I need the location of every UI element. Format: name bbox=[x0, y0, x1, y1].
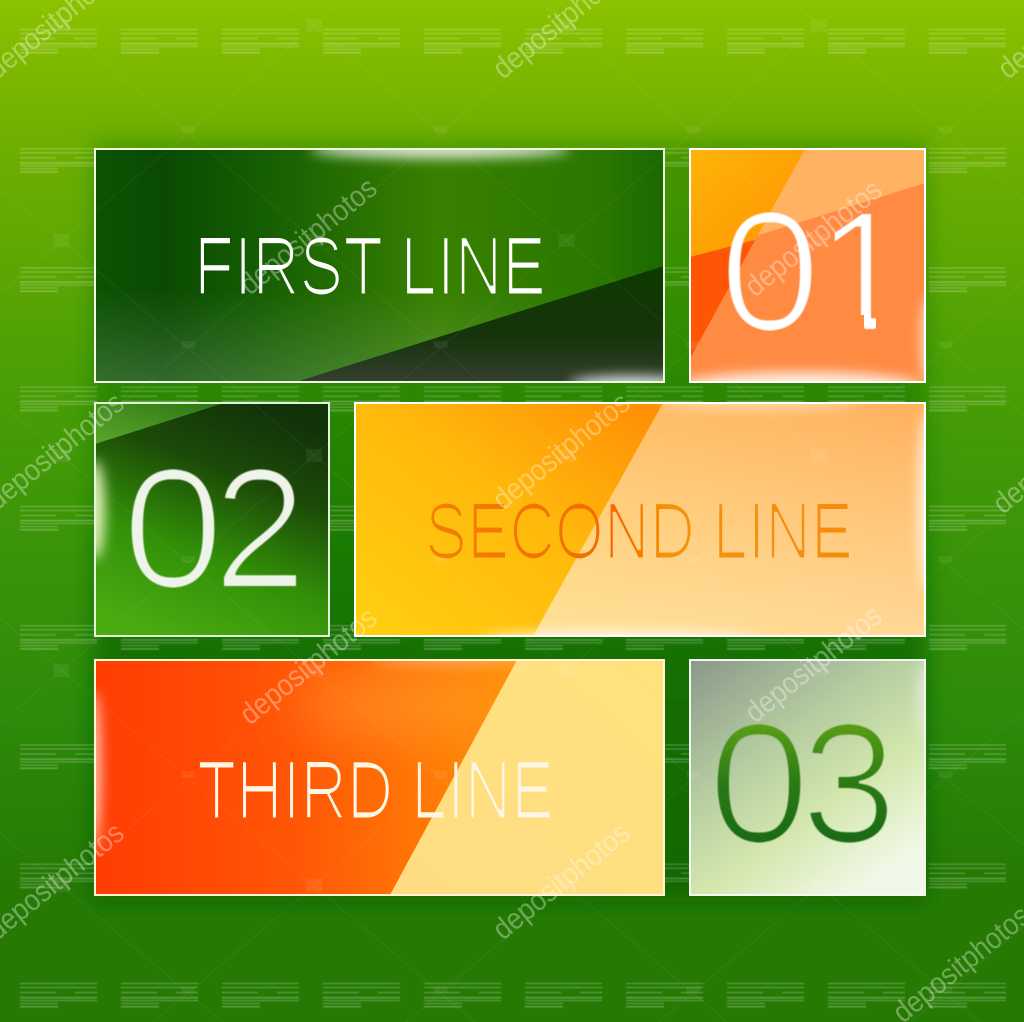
number: 01: 1 bbox=[816, 177, 910, 367]
depositphotos watermarks: depositphotos bbox=[234, 601, 383, 731]
dark shadow behind panels bbox=[92, 142, 928, 902]
number: 01 bbox=[728, 212, 876, 332]
depositphotos watermarks: depositphotos bbox=[487, 816, 636, 946]
light upper facet bbox=[758, 150, 924, 236]
panel border: number 02 bbox=[95, 403, 329, 636]
amber left facet bbox=[355, 403, 663, 636]
number: 01: 0 bbox=[719, 177, 821, 367]
panel border: number 01 bbox=[690, 149, 925, 382]
panel: first line bbox=[96, 150, 663, 381]
panel: third line bbox=[87, 655, 664, 895]
panel border: third line bbox=[95, 660, 664, 895]
panel: number 03 bbox=[690, 660, 938, 895]
pale right facet bbox=[390, 660, 664, 895]
number: 02: 0 bbox=[122, 434, 224, 624]
depositphotos watermarks: depositphotos bbox=[739, 173, 888, 303]
number: 03 bbox=[708, 689, 897, 879]
number: 02: 2 bbox=[213, 434, 307, 624]
heading: first line: FIRST LINE bbox=[194, 221, 546, 312]
depositphotos watermarks: depositphotos bbox=[739, 599, 888, 729]
heading: second line: SECOND LINE bbox=[425, 486, 853, 575]
panel: number 02 bbox=[85, 403, 329, 636]
number: 03: 0 bbox=[708, 689, 810, 879]
amber facet bbox=[690, 149, 805, 257]
number: 03: 3 bbox=[801, 689, 897, 879]
depositphotos watermarks: depositphotos bbox=[487, 386, 636, 516]
depositphotos watermarks: depositphotos bbox=[234, 171, 383, 301]
panel border: second line bbox=[355, 403, 925, 636]
dark diagonal wedge bbox=[296, 266, 664, 382]
light top-left facet bbox=[95, 403, 224, 444]
heading: third line: THIRD LINE bbox=[197, 745, 554, 836]
red facet bbox=[690, 240, 755, 358]
panel border: number 03 bbox=[690, 660, 925, 895]
panel border: first line bbox=[95, 149, 664, 382]
number: 02 bbox=[122, 434, 307, 624]
panel: number 01 bbox=[691, 150, 924, 381]
panel: second line bbox=[356, 404, 924, 635]
